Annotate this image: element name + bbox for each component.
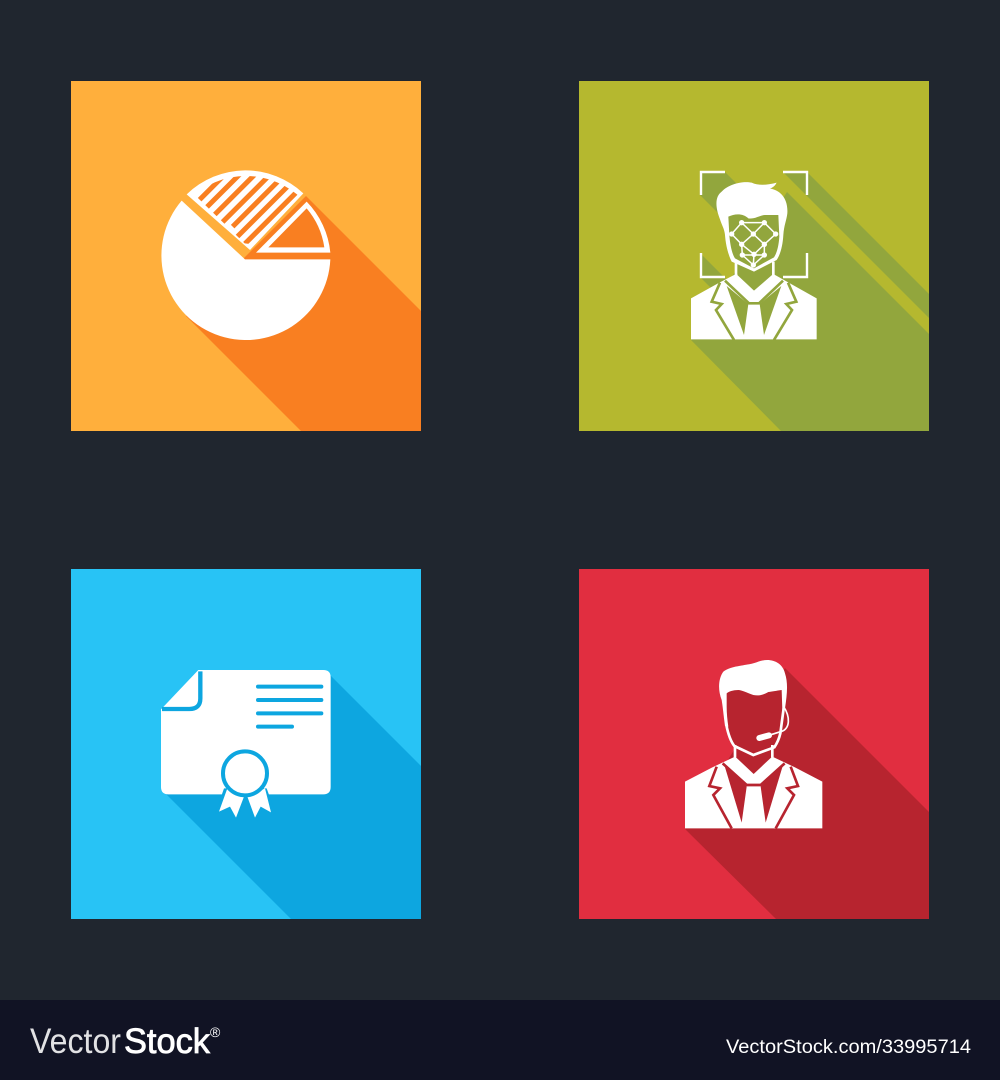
logo: VectorStock [30,1022,221,1061]
panel: certificate [71,569,421,919]
long shadow: pie chart [186,196,421,431]
icon: operator with headset [685,660,822,828]
image id text: VectorStock.com/33995714 [726,1037,971,1058]
icon: certificate with ribbon [161,670,331,822]
long shadow: face recognition [691,172,929,431]
long shadow: support operator [685,668,929,919]
panel: support operator [579,569,929,919]
icon: scan brackets [701,172,807,277]
logo: VectorStock: Vector [30,1022,121,1061]
icon: man with face mesh [691,182,817,340]
footer bar [0,1000,1000,1080]
logo: VectorStock: Stock [124,1022,210,1061]
icon: pie chart [161,160,330,340]
panel: face recognition [579,81,929,431]
panel: pie chart [71,81,421,431]
logo: VectorStock: ® [210,1024,221,1040]
long shadow: certificate [161,676,421,919]
